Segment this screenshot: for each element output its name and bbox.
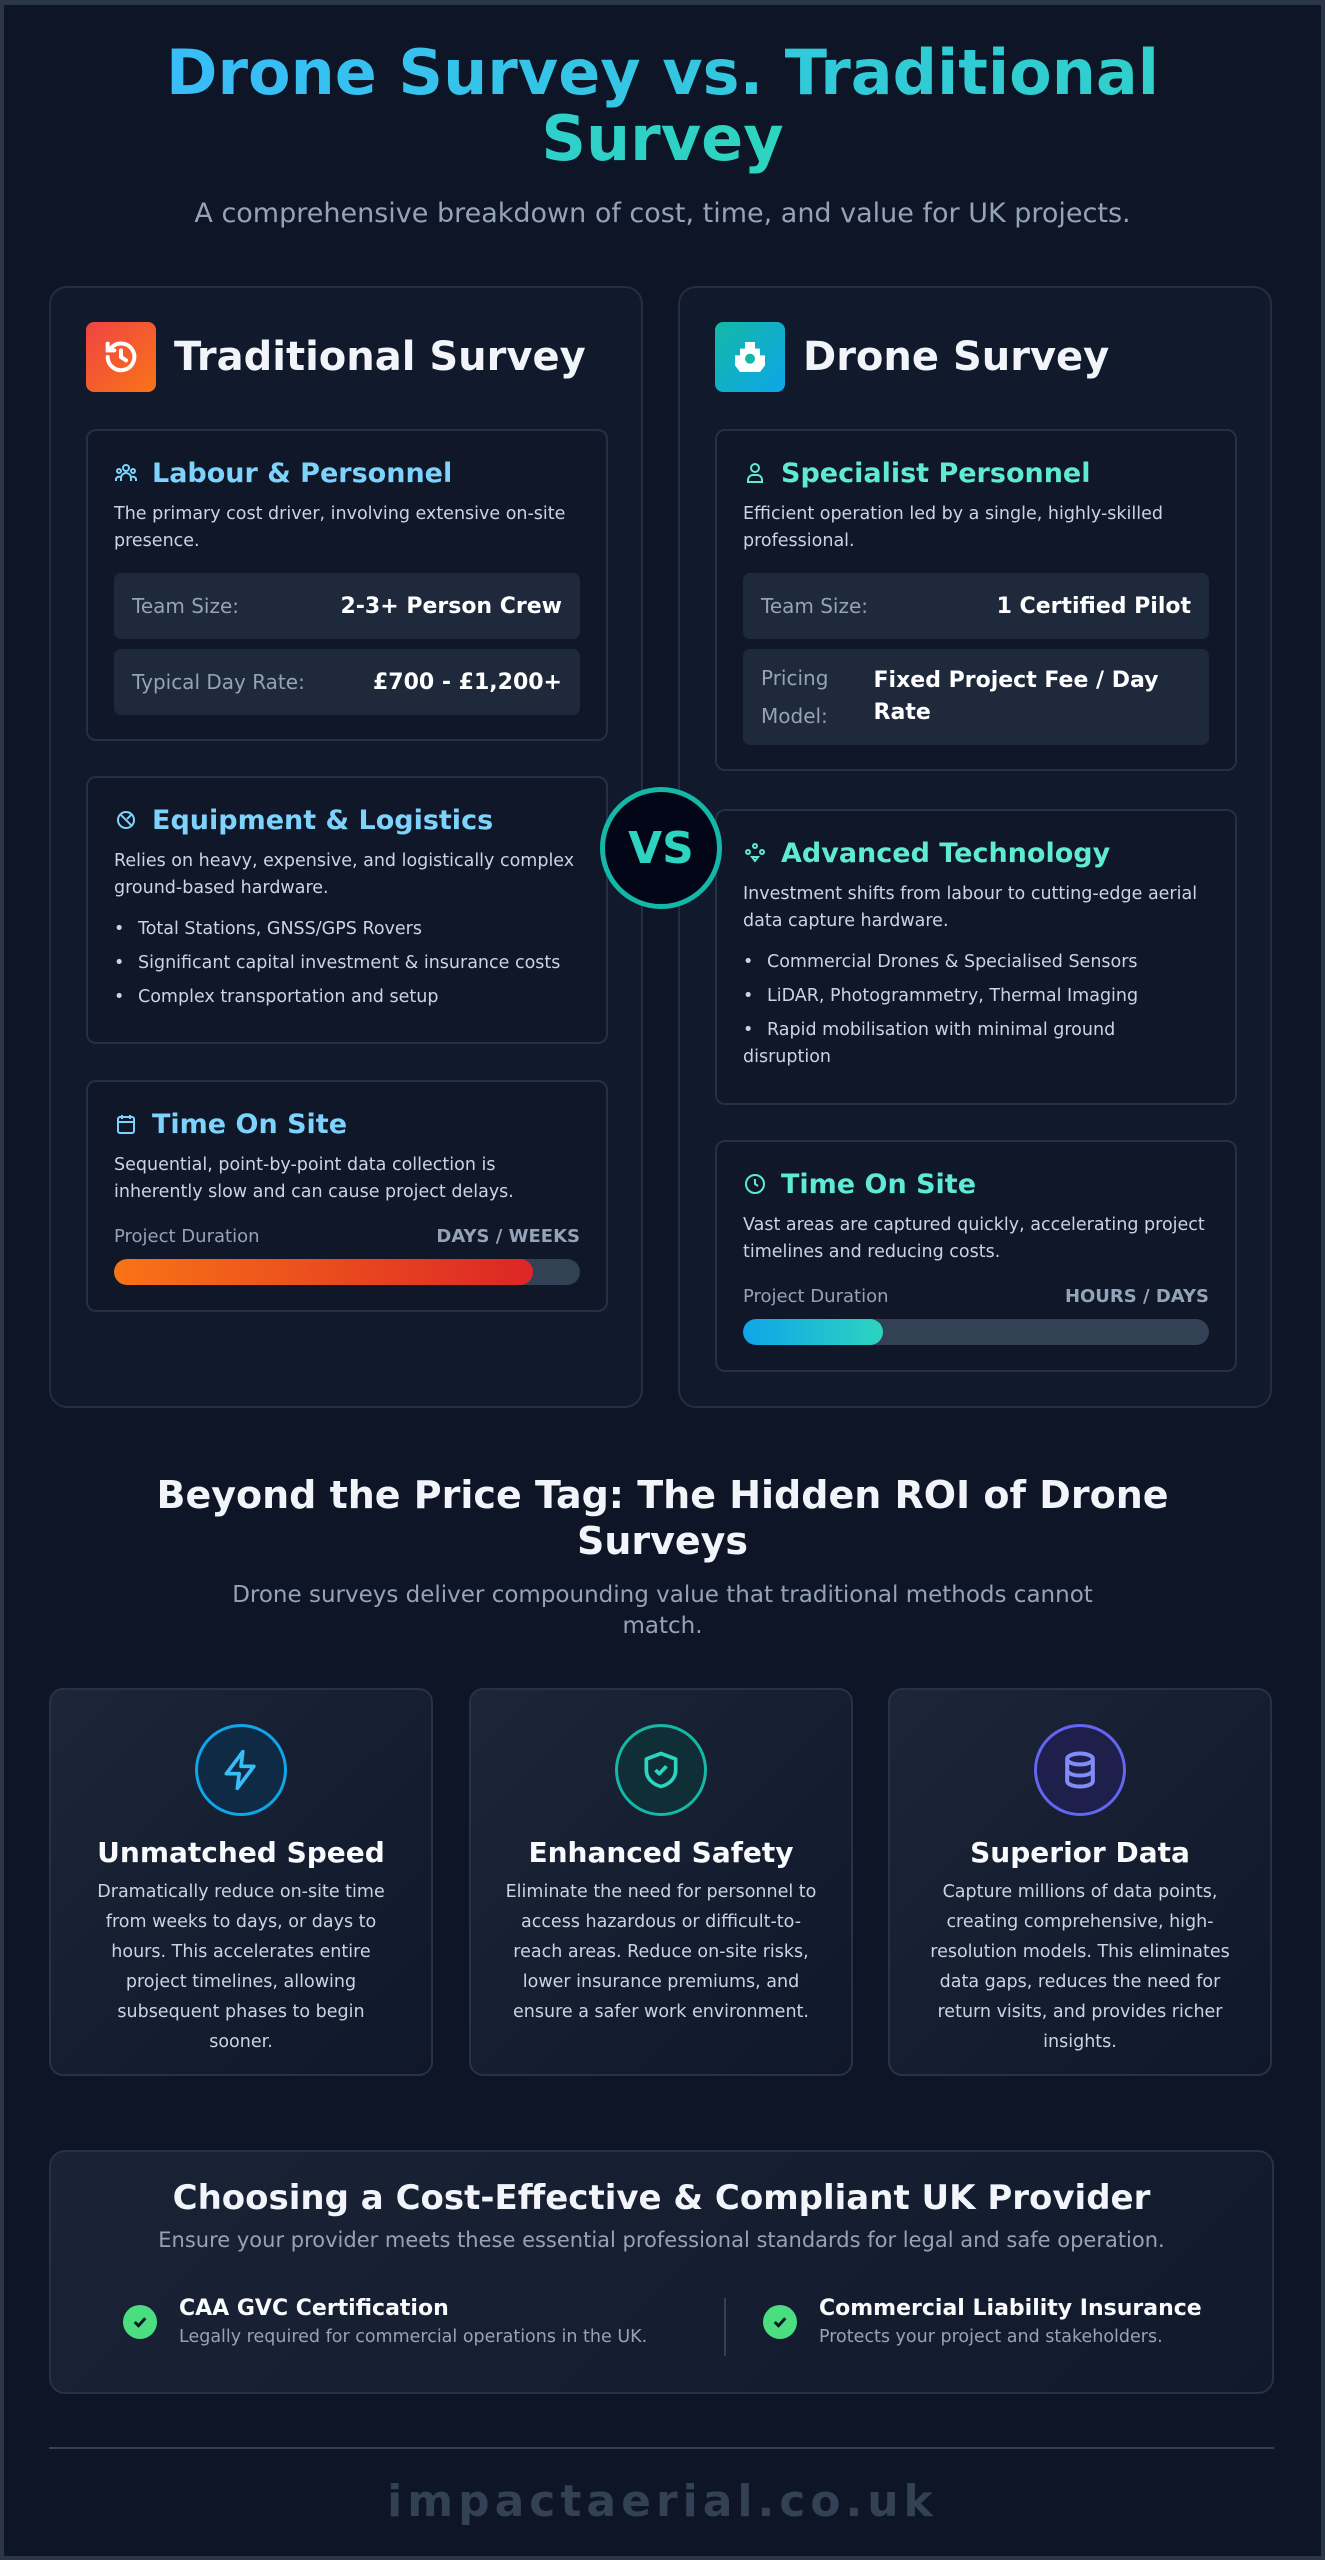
card: advanced technology: Advanced Technology [781,838,1110,868]
icon: database [1034,1724,1126,1816]
panel: traditional survey [49,286,643,1408]
card: advanced technology: Commercial Drones & Specialised Sensors [767,952,1138,972]
card: time on site (traditional): Project Duration [114,1226,260,1247]
section subtitle: Drone surveys deliver compounding value that traditional methods cannot match. [232,1582,1093,1639]
subtitle: A comprehensive breakdown of cost, time, and value for UK projects. [194,198,1131,229]
card: advanced technology: disruption [743,1047,831,1067]
panel header: drone [715,322,1109,392]
icon: clock history [86,322,156,392]
item: liability insurance: Commercial Liability Insurance [819,2296,1202,2321]
card: specialist personnel: Team Size: [761,594,868,618]
card: equipment & logistics: Complex transportation and setup [138,987,438,1007]
card: time on site (drone): Vast areas are captured quickly, accelerating project timelines and reducing costs. [743,1215,1205,1262]
card: labour & personnel: £700 - £1,200+ [373,670,562,694]
panel: drone survey [678,286,1272,1408]
card: time on site (traditional): Sequential, point-by-point data collection is inherently slow and can cause project delays. [114,1155,514,1202]
title [166,36,1159,175]
card: equipment & logistics: Equipment & Logistics [152,804,493,836]
card: equipment & logistics: Significant capital investment & insurance costs [138,953,560,973]
VS badge [600,787,722,909]
card: time on site (traditional): Time On Site [152,1108,347,1140]
item: liability insurance [763,2296,1202,2347]
card: specialist personnel: Pricing Model: [761,666,828,728]
card: time on site (traditional) [86,1080,608,1312]
card: unmatched speed: Dramatically reduce on-site time from weeks to days, or days to hours. This accelerates entire project timelines, allowing subsequent phases to begin sooner. [97,1882,385,2052]
icon: shield [615,1724,707,1816]
section heading: hidden ROI: Surveys [577,1519,748,1563]
card: enhanced safety [469,1688,853,2076]
card: time on site (traditional): DAYS / WEEKS [436,1226,580,1247]
card: advanced technology [715,809,1237,1105]
card: enhanced safety: Eliminate the need for personnel to access hazardous or difficult-to-reach areas. Reduce on-site risks, lower insurance premiums, and ensure a safer work environment. [506,1882,816,2022]
title: Survey [541,102,784,175]
card: time on site (drone): HOURS / DAYS [1065,1286,1209,1307]
bar: duration traditional [114,1259,580,1285]
card: labour & personnel: Labour & Personnel [152,458,452,488]
item: CAA GVC [123,2296,647,2347]
panel header: traditional: Traditional Survey [174,334,586,380]
card: specialist personnel: Specialist Personnel [781,458,1090,488]
card: enhanced safety: Enhanced Safety [528,1836,794,1869]
item: liability insurance: Protects your project and stakeholders. [819,2327,1163,2347]
card: superior data: Superior Data [970,1836,1190,1869]
card: labour & personnel: The primary cost driver, involving extensive on-site presence. [114,504,565,551]
provider subtitle: Ensure your provider meets these essential professional standards for legal and safe operation. [158,2228,1165,2252]
panel header: drone: Drone Survey [803,334,1109,380]
card: superior data: Capture millions of data points, creating comprehensive, high-resolution models. This eliminates data gaps, reduces the need for return visits, and provides richer insights. [930,1882,1230,2052]
panel header: traditional [86,322,586,392]
card: equipment & logistics: Total Stations, GNSS/GPS Rovers [138,919,422,939]
item: CAA GVC: Legally required for commercial operations in the UK. [179,2327,647,2347]
card: labour & personnel: 2-3+ Person Crew [340,594,562,618]
card: equipment & logistics: Relies on heavy, expensive, and logistically complex ground-based hardware. [114,851,574,898]
card: specialist personnel: 1 Certified Pilot [997,594,1191,618]
card: labour & personnel [86,429,608,741]
card: unmatched speed [49,1688,433,2076]
card: specialist personnel: Efficient operation led by a single, highly-skilled professional. [743,504,1163,551]
provider heading: Choosing a Cost-Effective & Compliant UK Provider [173,2178,1150,2218]
icon: drone [715,322,785,392]
card: equipment & logistics [86,776,608,1044]
card: superior data [888,1688,1272,2076]
section heading: hidden ROI [156,1473,1169,1563]
title: Drone Survey vs. Traditional [166,36,1159,109]
card: time on site (drone): Time On Site [781,1168,976,1200]
item: CAA GVC: CAA GVC Certification [179,2296,449,2321]
footer: website: impactaerial.co.uk [387,2476,938,2527]
card: labour & personnel: Team Size: [132,594,239,618]
bar: duration drone [743,1319,1209,1345]
card: advanced technology: Investment shifts from labour to cutting-edge aerial data capture hardware. [743,884,1197,931]
section heading: hidden ROI: Beyond the Price Tag: The Hidden ROI of Drone [156,1473,1169,1517]
card: advanced technology: Rapid mobilisation with minimal ground [767,1020,1115,1040]
card: unmatched speed: Unmatched Speed [97,1836,385,1869]
card: specialist personnel [715,429,1237,771]
panel: provider checklist [49,2150,1274,2394]
icon: lightning [195,1724,287,1816]
card: specialist personnel: Fixed Project Fee / Day Rate [874,668,1158,725]
card: labour & personnel: Typical Day Rate: [132,670,305,694]
card: advanced technology: LiDAR, Photogrammetry, Thermal Imaging [767,986,1138,1006]
VS badge: VS [628,822,694,874]
card: time on site (drone): Project Duration [743,1286,888,1307]
card: time on site (drone) [715,1140,1237,1372]
